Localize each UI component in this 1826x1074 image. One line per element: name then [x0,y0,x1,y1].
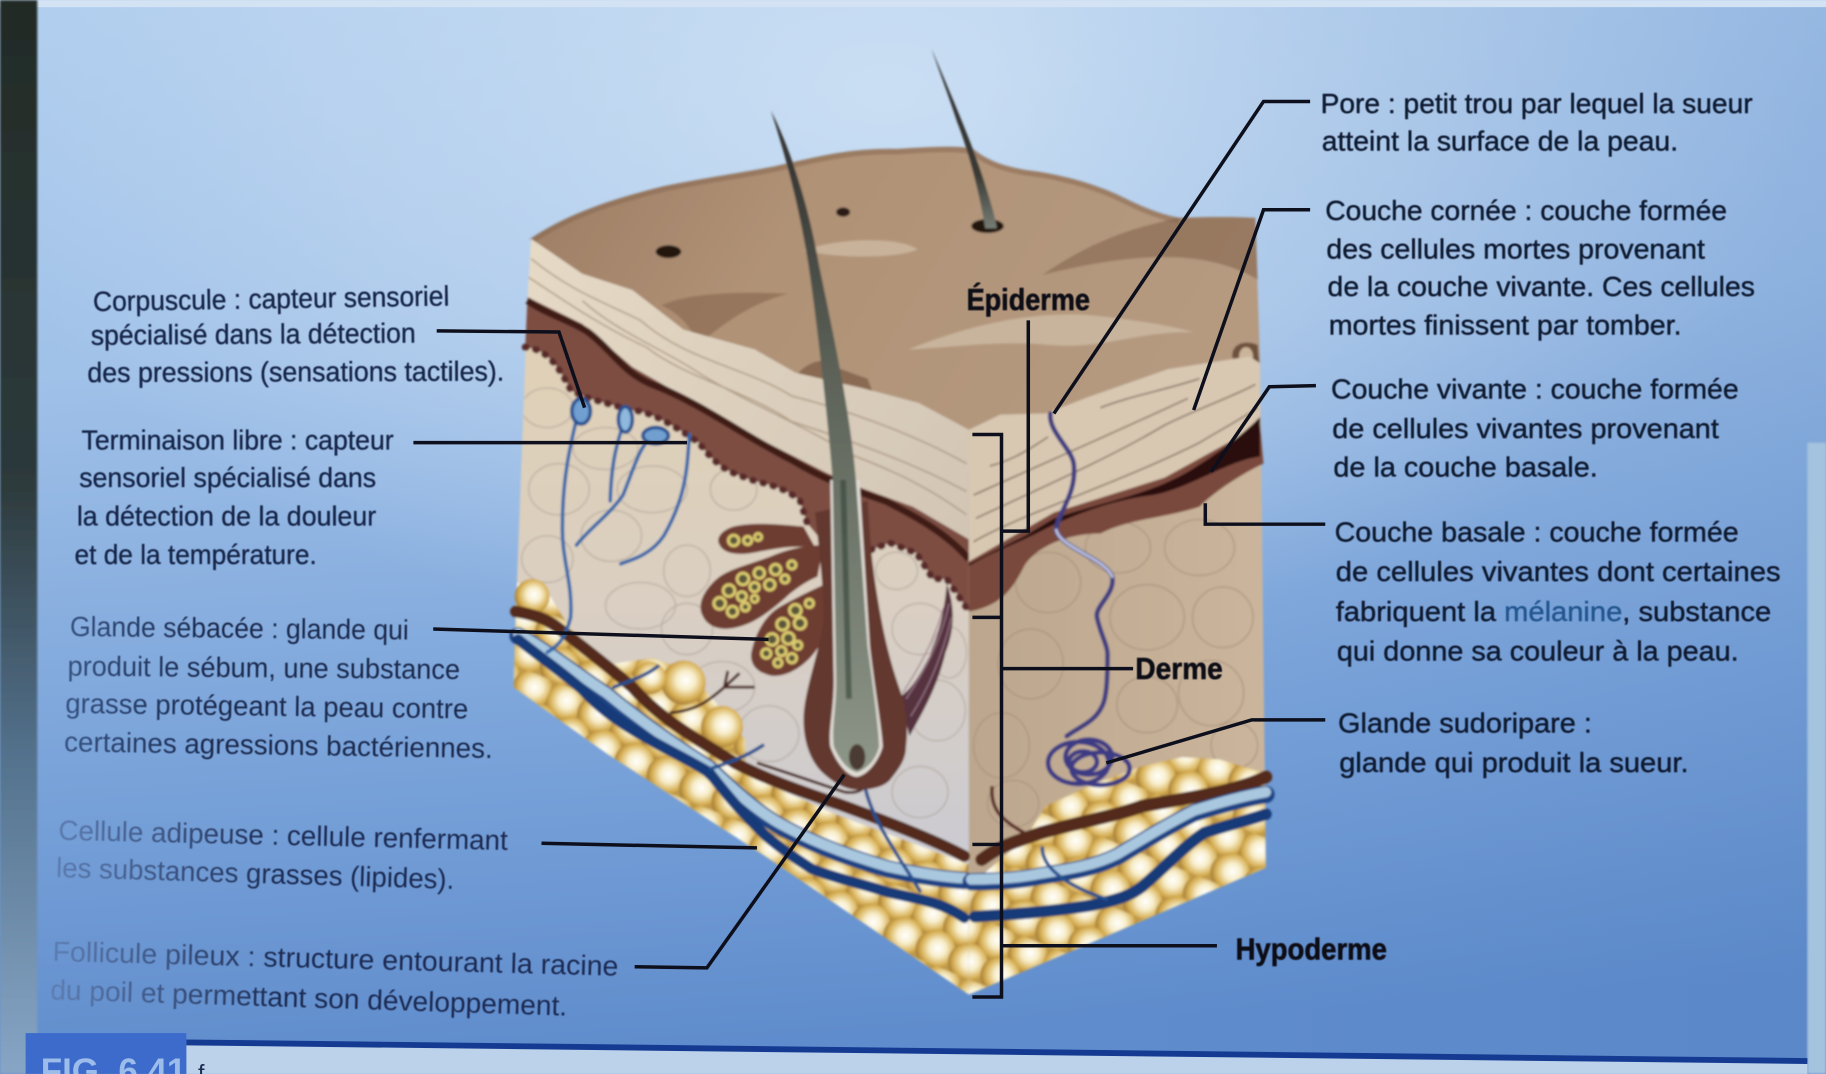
text: corpuscule: Corpuscule : capteur sensoriel [93,280,450,317]
figure caption bar [26,1033,1807,1074]
corpuscule leader [437,331,585,408]
text: glande sébacée: grasse protégeant la peau contre [65,688,468,724]
text: cellule adipeuse [56,815,508,895]
text: couche basale [1335,517,1781,666]
large fat cells above vein [515,579,743,748]
glande sudoripare leader [1106,720,1325,763]
text: pore: Pore : petit trou par lequel la sueur [1321,88,1753,119]
right descriptions [1321,88,1781,778]
dermal cell outlines, right [974,520,1258,827]
text: couche basale: fabriquent la mélanine, substance [1336,596,1771,627]
leader lines and brackets [413,101,1325,997]
pore leader [1054,101,1310,414]
left face: dermis [514,297,969,995]
text: couche basale: Couche basale : couche formée [1335,517,1739,548]
text: couche vivante: de cellules vivantes provenant [1332,413,1719,444]
label: hypoderme: Hypoderme [1236,934,1387,967]
text: cellule adipeuse: les substances grasses (lipides). [56,852,455,895]
dotted basal boundary, left [525,347,969,612]
right face: dermis [969,356,1266,995]
dermal cell outlines, left [522,388,967,818]
epidermis top band, right [969,356,1260,561]
main layer bracket [972,435,1002,997]
small branching nerve, right [992,786,1031,836]
skin surface [531,147,1260,430]
hair follicle bulb inner [830,480,883,777]
terminaison libre leader [413,441,687,444]
basal brown layer, left [525,297,969,612]
dark melanin line, right [969,417,1260,566]
text: couche vivante: de la couche basale. [1333,451,1598,482]
fat tissue, right [969,757,1266,995]
blue nerve endings [547,398,689,652]
label: derme: Derme [1135,653,1223,686]
text: glande sébacée [64,611,493,764]
brown artery, left and right [516,612,1266,860]
layer labels [967,283,1387,967]
text: glande sébacée: Glande sébacée : glande qui [70,611,409,646]
follicule pileux leader [635,775,844,968]
text: terminaison libre: et de la température. [75,539,317,570]
text: terminaison libre [75,425,394,570]
cellule adipeuse leader [542,843,757,848]
sweat gland duct and coil [1048,414,1130,785]
text: corpuscule: des pressions (sensations tactiles). [87,356,504,388]
text: pore [1321,88,1753,156]
derme leader [1002,667,1133,670]
figure number tab [26,1033,186,1074]
dark melanin line, left [528,301,969,559]
text: glande sudoripare [1338,708,1689,778]
fat tissue, left [514,582,969,995]
text: couche cornée: Couche cornée : couche formée [1325,195,1727,226]
left descriptions [50,280,619,1022]
text: couche cornée [1325,195,1755,340]
arrector pili muscle [900,584,953,736]
epidermis top band, left [528,239,969,539]
text: follicule pileux: du poil et permettant son développement. [50,974,568,1022]
main hair [771,111,879,772]
brown nerve branch with twigs [670,671,868,792]
text: glande sébacée: produit le sébum, une substance [67,651,460,685]
blue vessels, left and right [518,634,1266,918]
text: couche cornée: des cellules mortes provenant [1326,234,1705,265]
label: épiderme: Épiderme [967,283,1090,317]
text: glande sudoripare: glande qui produit la sueur. [1339,747,1689,778]
text: terminaison libre: la détection de la douleur [77,500,376,531]
basal brown layer, right [969,425,1264,612]
text: couche basale: qui donne sa couleur à la peau. [1337,635,1739,666]
text: couche basale: de cellules vivantes dont certaines [1336,556,1781,587]
couche vivante leader [1211,386,1316,472]
text: couche vivante: Couche vivante : couche formée [1331,373,1739,404]
text: glande sébacée: certaines agressions bactériennes. [64,726,493,764]
couche basale leader [1205,503,1325,524]
text: terminaison libre: sensoriel spécialisé dans [79,462,376,493]
hypoderme leader [1002,944,1217,947]
glande sébacée leader [433,629,769,639]
text: glande sudoripare: Glande sudoripare : [1338,708,1592,739]
text: cellule adipeuse: Cellule adipeuse : cellule renfermant [58,815,508,856]
text: pore: atteint la surface de la peau. [1322,125,1678,156]
sebaceous gland lobes [700,524,829,676]
épiderme bracket [1002,320,1028,531]
skin cube illustration [514,49,1266,995]
text: terminaison libre: Terminaison libre : capteur [82,425,394,456]
text: follicule pileux [50,936,619,1022]
text: couche cornée: mortes finissent par tomber. [1329,309,1682,340]
text: couche vivante [1331,373,1739,482]
hair follicle sheath [804,501,907,790]
text: corpuscule [87,280,504,388]
text: couche cornée: de la couche vivante. Ces cellules [1328,271,1755,302]
corpuscle capsules [572,398,590,424]
pores on the surface [656,207,1260,394]
text: corpuscule: spécialisé dans la détection [91,318,416,351]
text: follicule pileux: Follicule pileux : structure entourant la racine [52,936,619,982]
second hair [932,49,997,228]
couche cornée leader [1194,210,1310,410]
